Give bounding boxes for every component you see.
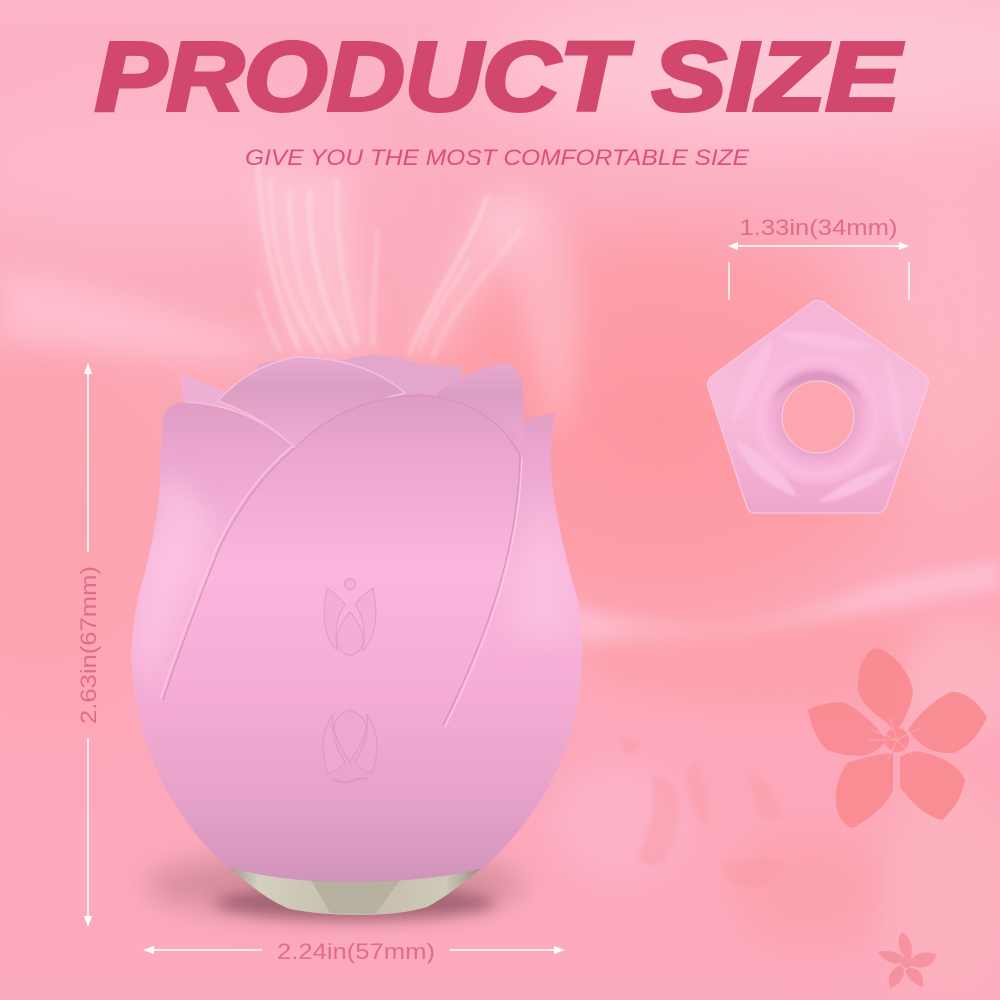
metal base (228, 866, 484, 915)
petal edges (160, 395, 522, 727)
width dimension: front view (143, 939, 565, 964)
back centre bud (257, 355, 463, 405)
decoration: small blossom (878, 932, 937, 988)
flower stamens (868, 718, 920, 760)
title: PRODUCT (95, 22, 634, 131)
product: pentagon top view (708, 300, 928, 513)
width dimension: top view (728, 215, 909, 300)
decoration: large blossom (808, 648, 987, 828)
upper button icon (324, 578, 376, 655)
ring hole (782, 381, 854, 453)
side highlights (135, 470, 575, 700)
lower button icon (323, 710, 377, 783)
title (95, 22, 904, 131)
height dimension (76, 363, 101, 927)
silicone ring (750, 349, 886, 485)
product shadow (145, 851, 525, 919)
top middle petal (218, 357, 405, 448)
height dimension: 2.63in(67mm) (76, 566, 101, 724)
suction air streams (250, 150, 540, 357)
decoration: faded petals (620, 740, 785, 888)
product: rose, front view (131, 355, 582, 915)
far left back petal (179, 375, 240, 420)
crease petals (732, 332, 903, 503)
width dimension: front view: 2.24in(57mm) (277, 939, 435, 964)
width dimension: top view: 1.33in(34mm) (740, 215, 898, 240)
title: SIZE (652, 22, 904, 131)
subtitle: GIVE YOU THE MOST COMFORTABLE SIZE (245, 145, 750, 170)
right back petal (437, 363, 524, 455)
main body (131, 395, 582, 882)
